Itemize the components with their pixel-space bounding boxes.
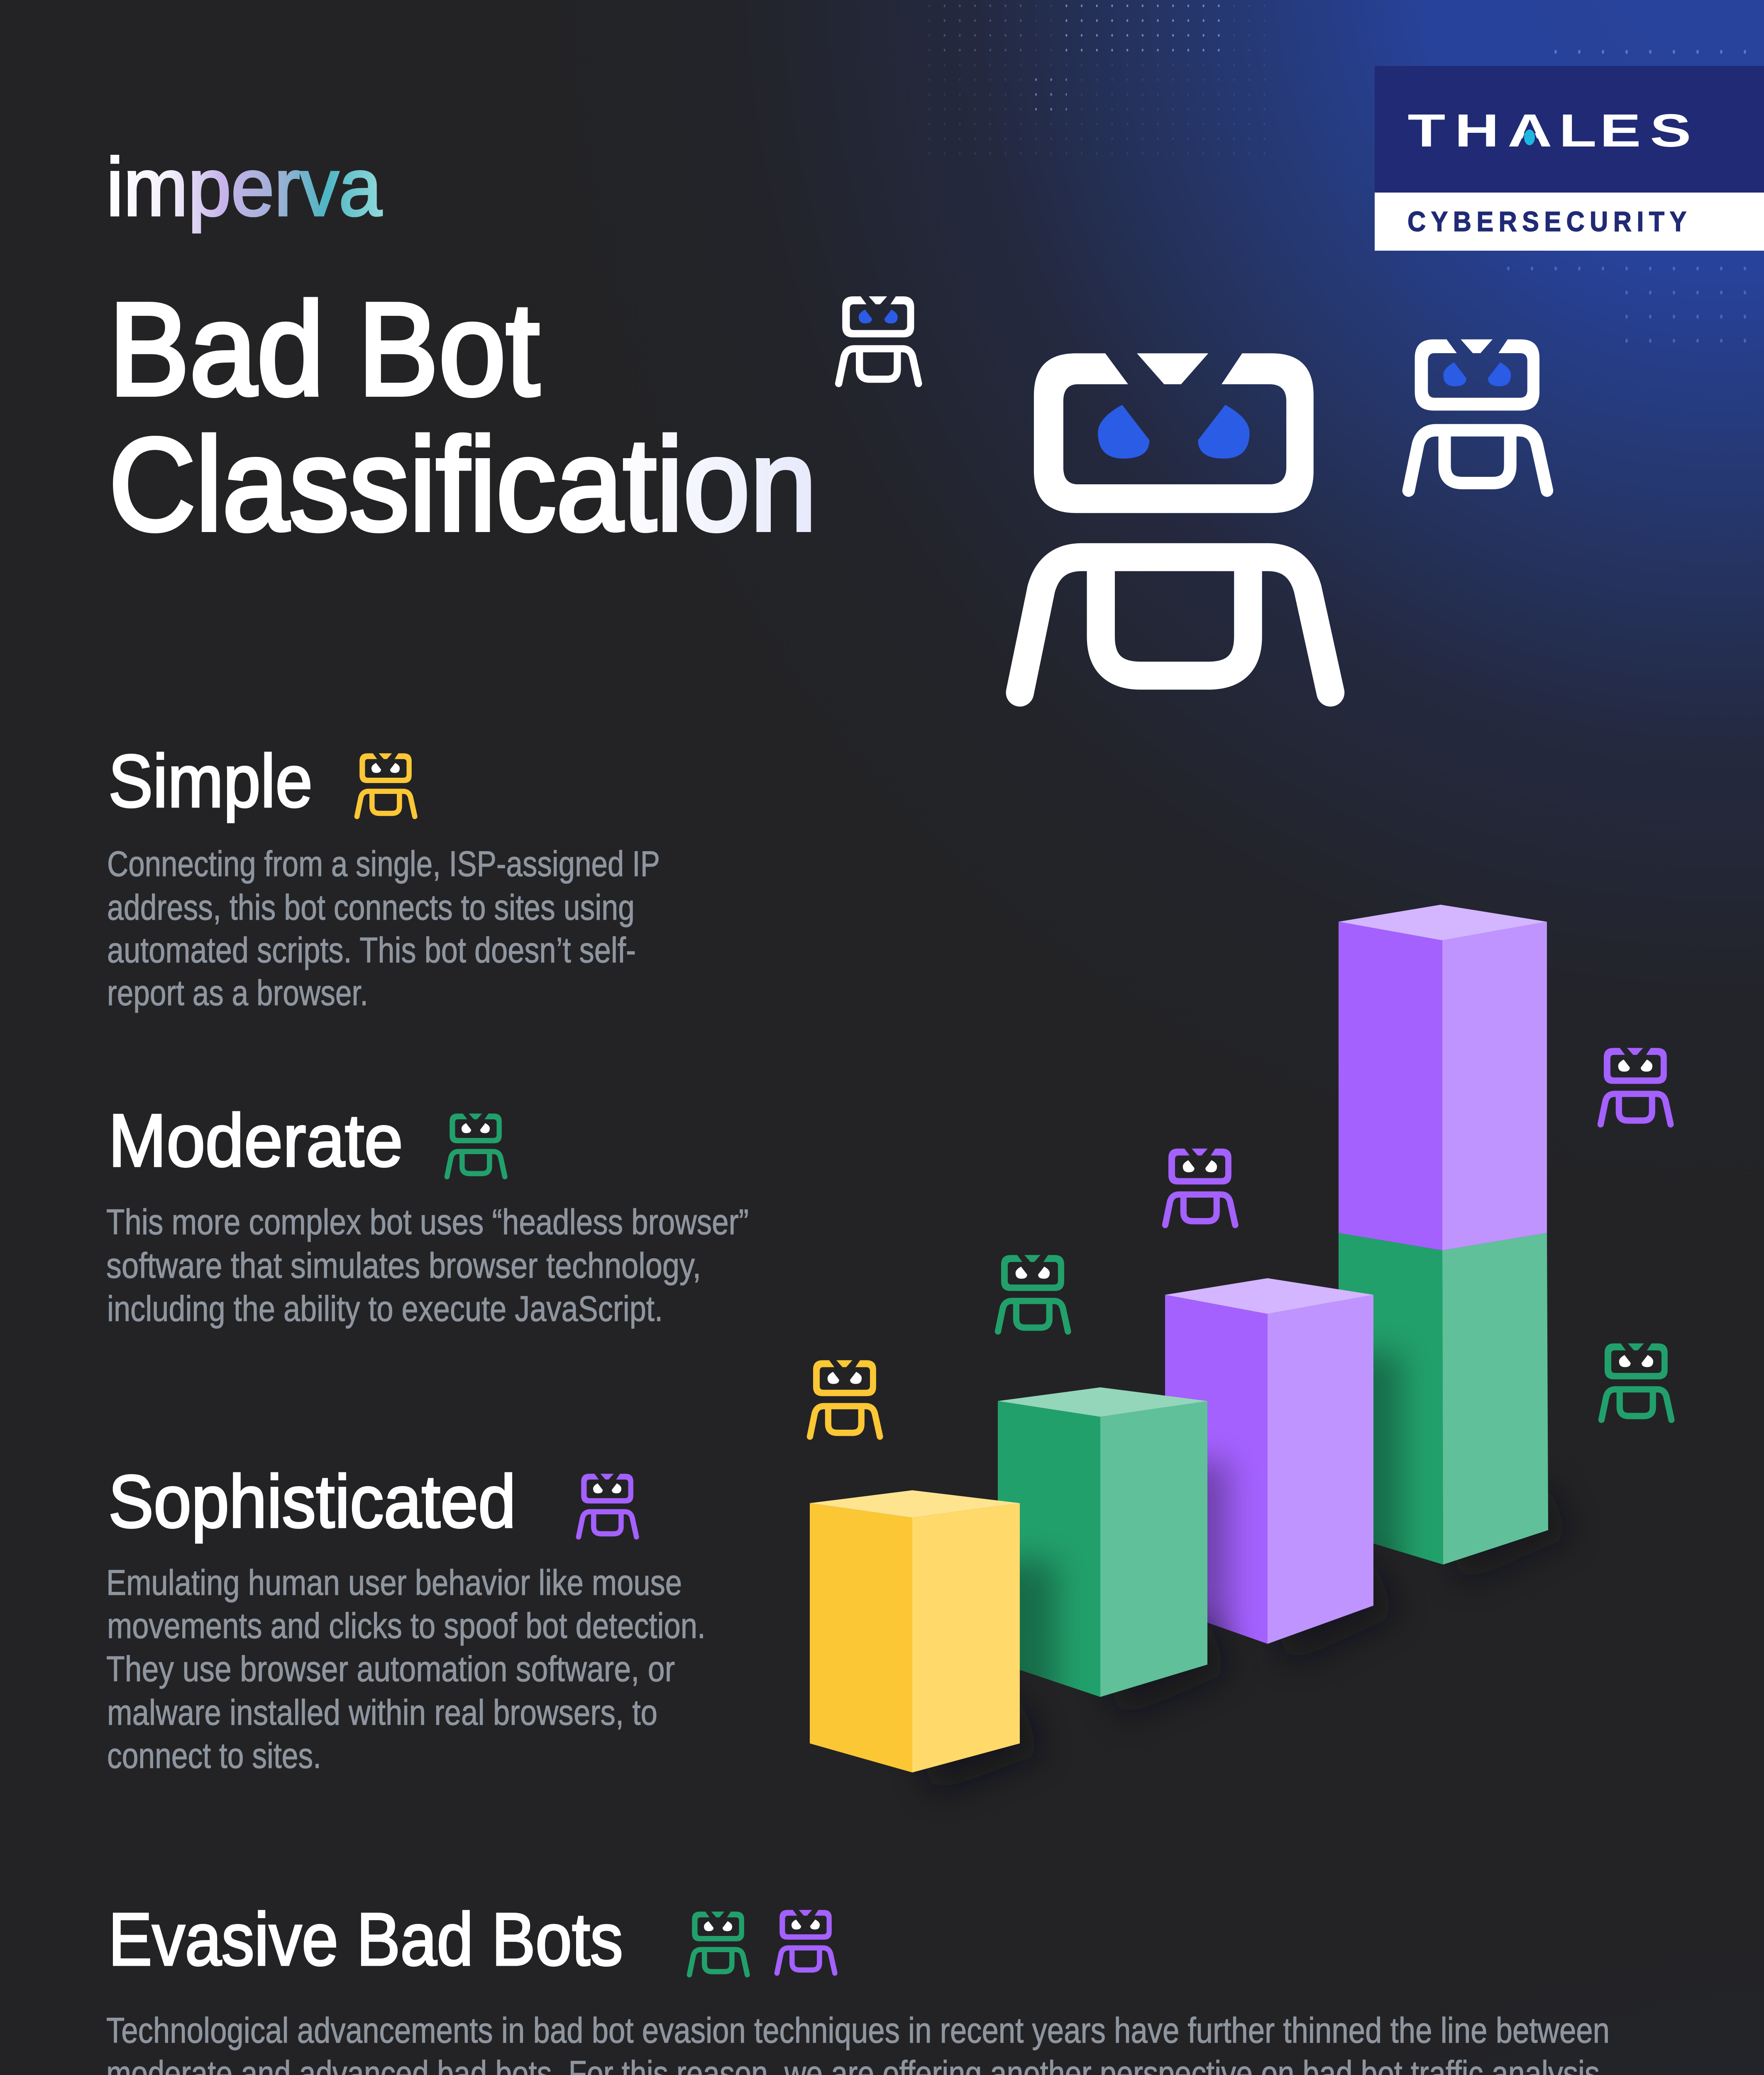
icon: yellow bot: [357, 753, 415, 817]
dotted grid: top centre: [926, 0, 1278, 158]
icon: purple bot beside tall bar: [1600, 1048, 1671, 1124]
logo: Thales Cybersecurity: CYBERSECURITY: [1407, 205, 1686, 237]
heading: Simple: Simple: [108, 740, 313, 823]
text: Simple description: [107, 844, 660, 1013]
section: Moderate: [106, 1099, 749, 1329]
icon: yellow bot above yellow bar: [810, 1360, 880, 1437]
dotted grid: around logo: [1494, 42, 1752, 349]
section: Sophisticated: [106, 1460, 706, 1776]
section: Simple: [107, 740, 660, 1013]
title: [109, 276, 817, 558]
icon: green bot beside tall bar: [1601, 1343, 1671, 1420]
bar: tall purple and green: [1307, 905, 1571, 1639]
text: Moderate description: This more complex bot uses “headless browser”: [106, 1202, 749, 1242]
text: Moderate description: [106, 1202, 749, 1329]
text: Sophisticated description: [106, 1563, 706, 1776]
text: Sophisticated description: movements and clicks to spoof bot detection.: [107, 1606, 706, 1646]
bar: yellow: [810, 1490, 1042, 1793]
heading: Evasive Bad Bots: Evasive Bad Bots: [108, 1898, 623, 1981]
text: Sophisticated description: malware installed within real browsers, to: [107, 1693, 657, 1733]
bar chart: 3D bars: [810, 905, 1571, 1793]
text: Sophisticated description: Emulating human user behavior like mouse: [106, 1563, 682, 1603]
icon: green bot: [447, 1113, 505, 1177]
icon: green bot: [689, 1911, 747, 1975]
logo: imperva: imperva: [106, 141, 382, 233]
text: Simple description: Connecting from a single, ISP-assigned IP: [107, 844, 660, 884]
icon: purple bot: [579, 1474, 636, 1537]
logo: Thales Cybersecurity: THALES: [1407, 105, 1691, 156]
text: Simple description: address, this bot connects to sites using: [107, 888, 635, 928]
icon: purple bot: [777, 1910, 835, 1973]
text: Simple description: automated scripts. This bot doesn’t self-: [107, 930, 636, 970]
icon: medium white bot: [1409, 339, 1547, 491]
text: Sophisticated description: They use browser automation software, or: [106, 1649, 675, 1689]
icon: green bot above green bar: [998, 1255, 1068, 1331]
icon: large white bot: [1020, 353, 1331, 693]
title: Classification: [109, 411, 817, 558]
text: Moderate description: software that simulates browser technology,: [106, 1246, 701, 1286]
text: Moderate description: including the ability to execute JavaScript.: [107, 1289, 663, 1329]
section: Evasive Bad Bots: [106, 1898, 1610, 2075]
text: Sophisticated description: connect to sites.: [107, 1736, 321, 1776]
bar: purple: [1165, 1278, 1392, 1659]
icon: small white bot: [839, 296, 919, 383]
bar: green: [998, 1387, 1240, 1713]
heading: Sophisticated: Sophisticated: [108, 1460, 516, 1543]
title: Bad Bot: [109, 276, 540, 423]
logo: Thales Cybersecurity: [1375, 66, 1764, 251]
text: Simple description: report as a browser.: [107, 973, 368, 1013]
heading: Moderate: Moderate: [108, 1099, 403, 1182]
text: Evasive description: [106, 2011, 1610, 2075]
icon: purple bot above purple bar: [1165, 1149, 1235, 1225]
